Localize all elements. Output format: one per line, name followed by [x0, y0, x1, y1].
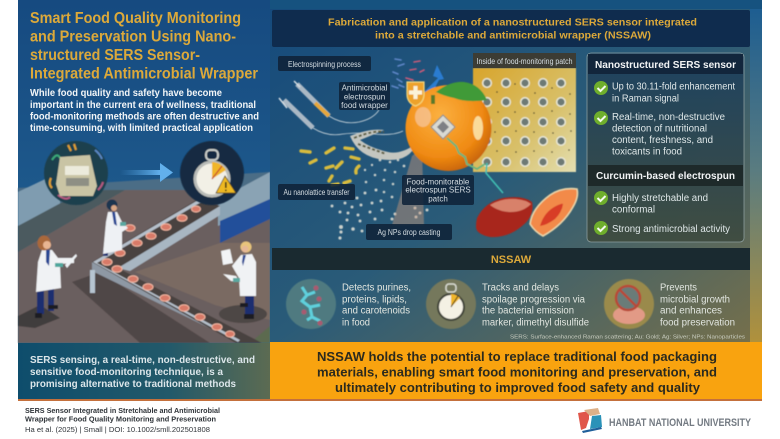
- label: Ag drop casting: [366, 224, 452, 240]
- text: sensor features: content, freshness, and: [612, 135, 713, 146]
- intro text: time-consuming, with limited practical application: [30, 123, 253, 134]
- text: electrospun features: Highly stretchable and: [612, 193, 708, 204]
- label: antimicrobial wrapper: [339, 82, 390, 110]
- text: prevents: and enhances: [660, 306, 722, 316]
- callout: conclusion: NSSAW holds the potential to replace traditional food packaging: [317, 350, 717, 364]
- icon: connector to patch: [486, 163, 503, 193]
- conveyor: [90, 198, 262, 343]
- title: Smart Food Quality Monitoring: [30, 10, 241, 27]
- text: prevents: microbial growth: [660, 294, 730, 306]
- icon: collector ribbon: [350, 130, 416, 160]
- icon: salmon: [530, 189, 578, 236]
- icons: check marks: [594, 81, 608, 235]
- text block: SERS sensing promise: promising alternative to traditional methods: [30, 378, 236, 390]
- text: detects: in food: [342, 318, 370, 328]
- icon: orange fruit: [406, 82, 492, 171]
- text: electrospun features: conformal: [612, 204, 655, 216]
- label: inside of patch: Inside of food-monitoring patch: [476, 57, 572, 66]
- callout: conclusion: [18, 342, 762, 401]
- icon: silver nanoparticles: [330, 159, 428, 240]
- heading: NSSAW: [272, 248, 750, 270]
- label: electrospinning process: Electrospinning process: [288, 60, 361, 69]
- label: SERS patch: Food-monitorable: [407, 178, 470, 186]
- text block: SERS sensing promise: SERS sensing, a real-time, non-destructive, and: [30, 354, 255, 366]
- panel: right background: [270, 0, 762, 342]
- heading: NSSAW: NSSAW: [491, 254, 532, 266]
- text: prevents: Prevents: [660, 282, 697, 294]
- text: electrospun features: Strong antimicrobial activity: [612, 224, 730, 235]
- label: SERS patch: electrospun SERS: [405, 186, 471, 194]
- logo: Hanbat National University: [578, 408, 752, 433]
- text block: SERS sensing promise: sensitive food-monitoring technique, is a: [30, 366, 223, 378]
- label: antimicrobial wrapper: electrospun: [344, 92, 385, 102]
- text: sensor features: [612, 82, 735, 158]
- illustration: food lab factory scene: [18, 172, 270, 343]
- callout: conclusion: materials, enabling smart food monitoring and preservation, and: [317, 366, 717, 380]
- heading: fabrication panel: Fabrication and application of a nanostructured SERS sensor integrated: [328, 16, 697, 28]
- icon: shield: [407, 82, 424, 106]
- person: right scientist: [221, 242, 256, 319]
- icon: microbes: [392, 59, 424, 88]
- text: detects: [342, 282, 411, 328]
- label: Ag drop casting: Ag NPs drop casting: [378, 228, 440, 237]
- text: sensor features: in Raman signal: [612, 94, 679, 104]
- icon: growth arrow: [424, 65, 444, 97]
- label: inside of patch: [473, 53, 576, 68]
- text: tracks: [482, 282, 589, 328]
- icon: syringes: [279, 81, 403, 135]
- intro text: food-monitoring methods are often destructive and: [30, 112, 259, 122]
- illustration: electrospinning and application: [279, 59, 578, 240]
- label: antimicrobial wrapper: food wrapper: [341, 101, 388, 110]
- title: [30, 10, 258, 82]
- text: electrospun features: [612, 193, 730, 235]
- label: Au transfer: Au nanolattice transfer: [284, 188, 350, 197]
- person: left scientist: [35, 236, 77, 318]
- title: and Preservation Using Nano-: [30, 28, 236, 46]
- footnote: abbreviations: SERS: Surface-enhanced Raman scattering; Au: Gold; Ag: Silver; NPs: Nanoparticles: [510, 334, 745, 340]
- title: Integrated Antimicrobial Wrapper: [30, 66, 258, 82]
- intro text: [30, 88, 259, 134]
- citation: Ha et al. (2025) | Small | DOI: 10.1002/smll.202501808: [25, 425, 210, 434]
- heading: Nanostructured SERS sensor: Nanostructured SERS sensor: [595, 60, 736, 71]
- panel: left introduction: [18, 0, 270, 400]
- icon: gold nanorods: [301, 148, 359, 185]
- heading: fabrication panel: [272, 10, 750, 47]
- text: tracks: Tracks and delays: [482, 282, 559, 294]
- heading: fabrication panel: into a stretchable and antimicrobial wrapper (NSSAW): [375, 30, 651, 42]
- icon: patch detail: [473, 68, 576, 172]
- text: tracks: the bacterial emission: [482, 306, 574, 316]
- text: sensor features: toxicants in food: [612, 146, 682, 158]
- label: SERS patch: [402, 175, 474, 205]
- heading: Curcumin-based electrospun: [588, 165, 743, 186]
- text: prevents: food preservation: [660, 318, 735, 328]
- intro text: important in the current era of wellness, traditional: [30, 100, 256, 111]
- text: tracks: spoilage progression via: [482, 294, 585, 306]
- text: sensor features: detection of nutritional: [612, 124, 707, 134]
- icon: molecule: [286, 279, 336, 329]
- citation: Wrapper for Food Quality Monitoring and Preservation: [25, 414, 216, 424]
- text: sensor features: Real-time, non-destructive: [612, 112, 725, 123]
- label: SERS patch: patch: [428, 194, 448, 204]
- arrow: to slow testing: [120, 163, 173, 182]
- icon: stopwatch: [426, 279, 476, 329]
- panel: NSSAW: [272, 248, 750, 340]
- text: detects: proteins, lipids,: [342, 294, 407, 306]
- label: Au transfer: [278, 184, 355, 200]
- person: centre scientist: [103, 200, 128, 256]
- citation: [25, 406, 220, 434]
- icon: logo mark: [578, 408, 602, 433]
- label: electrospinning process: [278, 56, 371, 71]
- text: prevents: [660, 282, 735, 328]
- text: sensor features: Up to 30.11-fold enhancement: [612, 82, 735, 92]
- panel: sensor and electrospun properties: [587, 53, 744, 242]
- icon: food analyzer in a circle: [44, 141, 108, 205]
- text: detects: Detects purines,: [342, 282, 411, 294]
- heading: Nanostructured SERS sensor: [588, 54, 743, 74]
- text: tracks: marker, dimethyl disulfide: [482, 318, 589, 328]
- label: antimicrobial wrapper: Antimicrobial: [342, 84, 388, 92]
- title: structured SERS Sensor-: [30, 47, 200, 64]
- intro text: While food quality and safety have become: [30, 88, 222, 99]
- callout: conclusion: ultimately contributing to improved food safety and quality: [335, 381, 700, 395]
- icon: stopwatch with warning: [180, 141, 244, 205]
- heading: Curcumin-based electrospun: Curcumin-based electrospun: [596, 171, 735, 182]
- logo: Hanbat National University: HANBAT NATIONAL UNIVERSITY: [609, 417, 752, 429]
- text: detects: and carotenoids: [342, 306, 410, 316]
- citation: SERS Sensor Integrated in Stretchable and Antimicrobial: [25, 406, 220, 415]
- text block: SERS sensing promise: [18, 343, 270, 399]
- icon: raw meat: [476, 197, 533, 237]
- icon: protected meat: [604, 279, 654, 329]
